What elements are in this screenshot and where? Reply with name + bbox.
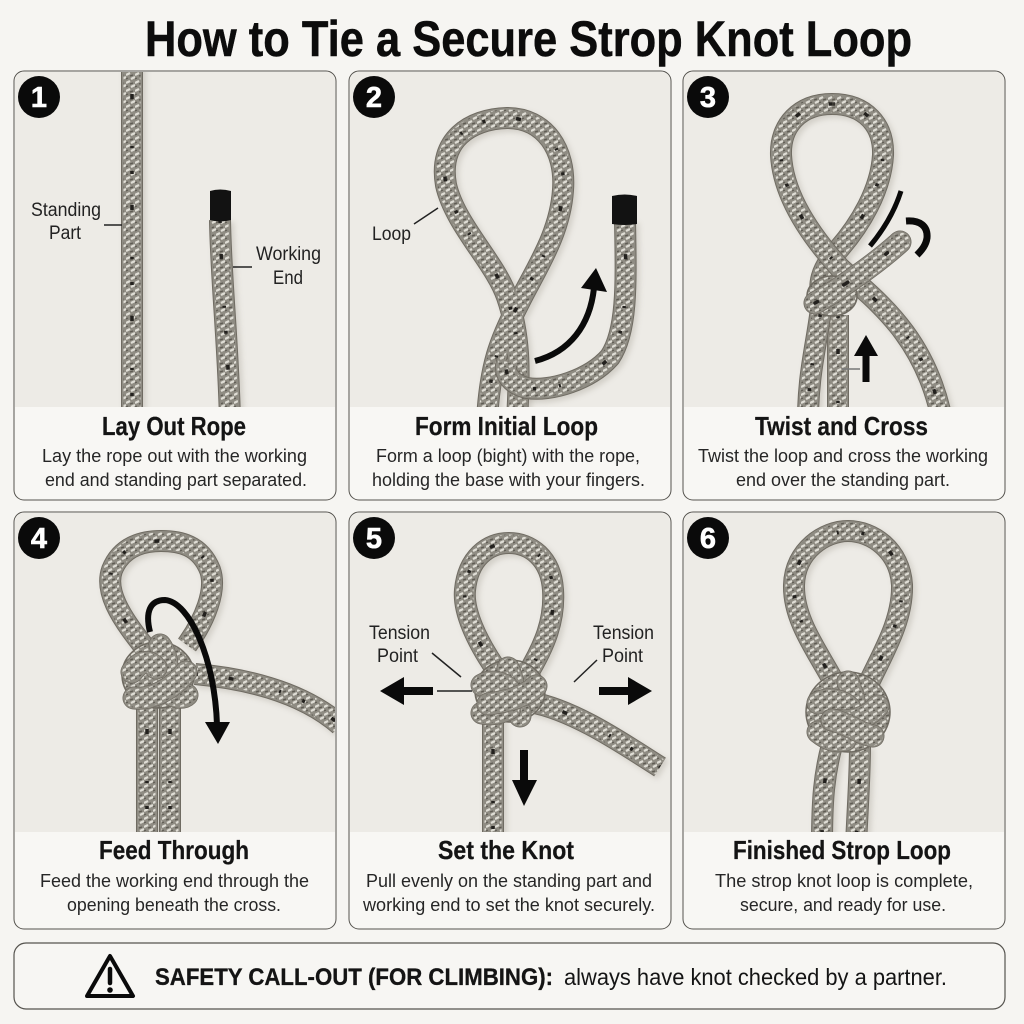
step number 5: 5 xyxy=(366,523,382,555)
label: standing part: Part xyxy=(49,223,82,244)
arrow: pull left xyxy=(380,677,433,705)
caption: lay out rope: Lay Out Rope xyxy=(102,411,246,441)
rope: tightened knot xyxy=(465,543,663,848)
label: working end xyxy=(233,244,321,289)
label: working end: Working xyxy=(256,244,321,265)
caption: lay out rope: end and standing part separated. xyxy=(45,469,307,490)
caption: lay out rope: Lay the rope out with the working xyxy=(42,445,307,466)
safety call-out xyxy=(14,943,1005,1009)
label: tension point right: Tension xyxy=(593,623,654,644)
arrow: feed through xyxy=(148,600,230,744)
label: tension point left xyxy=(369,623,472,691)
step number 6 xyxy=(687,517,729,559)
step number 1 xyxy=(18,76,60,118)
label: loop xyxy=(372,208,438,245)
caption: form initial loop: holding the base with your fingers. xyxy=(372,469,645,490)
arrow: up xyxy=(842,335,878,382)
caption: form initial loop xyxy=(372,411,645,490)
safety text xyxy=(155,964,947,991)
caption: form initial loop: Form a loop (bight) with the rope, xyxy=(376,445,640,466)
caption: twist and cross: end over the standing part. xyxy=(736,469,950,490)
caption: twist and cross xyxy=(698,411,988,490)
step number 3: 3 xyxy=(700,82,716,114)
caption: finished strop loop: The strop knot loop is complete, xyxy=(715,870,973,891)
label: standing part: Standing xyxy=(31,200,101,221)
rope: loop and working end xyxy=(445,118,637,423)
label: tension point left: Point xyxy=(377,646,419,667)
arrows: twist direction xyxy=(870,191,927,255)
caption: feed through: Feed Through xyxy=(99,835,249,865)
label: tension point right: Point xyxy=(602,646,644,667)
panel 6: finished strop loop xyxy=(683,512,1005,929)
caption: feed through: opening beneath the cross. xyxy=(67,894,281,915)
panel 3: twist and cross xyxy=(683,71,1005,500)
caption: finished strop loop xyxy=(715,835,973,915)
safety text: SAFETY CALL-OUT (FOR CLIMBING): xyxy=(155,964,553,991)
label: tension point left: Tension xyxy=(369,623,430,644)
panel 5: set the knot xyxy=(349,512,671,929)
step number 5 xyxy=(353,517,395,559)
caption: set the knot: working end to set the knot securely. xyxy=(362,894,655,915)
caption: set the knot xyxy=(362,835,655,915)
arrow: curved up xyxy=(535,268,607,361)
caption: twist and cross: Twist and Cross xyxy=(755,411,928,441)
step number 3 xyxy=(687,76,729,118)
caption: form initial loop: Form Initial Loop xyxy=(415,411,598,441)
step number 2: 2 xyxy=(366,82,382,114)
panel 4: feed through xyxy=(14,512,343,929)
panel 1: lay out rope xyxy=(14,60,336,500)
label: loop: Loop xyxy=(372,224,411,245)
safety text: always have knot checked by a partner. xyxy=(564,964,947,990)
caption: finished strop loop: Finished Strop Loop xyxy=(733,835,951,865)
caption: feed through xyxy=(40,835,309,915)
caption: finished strop loop: secure, and ready for use. xyxy=(740,894,946,915)
step number 4: 4 xyxy=(31,523,47,555)
caption: set the knot: Set the Knot xyxy=(438,835,574,865)
rope: standing part and working end xyxy=(132,60,233,422)
arrow: pull down xyxy=(512,750,537,806)
caption: twist and cross: Twist the loop and cross the working xyxy=(698,445,988,466)
caption: feed through: Feed the working end through the xyxy=(40,870,309,891)
icon: warning triangle xyxy=(87,956,133,996)
label: working end: End xyxy=(273,268,303,289)
caption: lay out rope xyxy=(42,411,307,490)
caption: set the knot: Pull evenly on the standing part and xyxy=(366,870,652,891)
step number 4 xyxy=(18,517,60,559)
rope: twisted loop xyxy=(781,104,945,423)
panel 2: form initial loop xyxy=(349,71,671,500)
rope: loop with knot xyxy=(110,541,343,848)
step number 1: 1 xyxy=(31,82,47,114)
arrow: pull right xyxy=(599,677,652,705)
label: tension point right xyxy=(574,623,654,682)
rope: finished loop xyxy=(794,531,905,848)
label: standing part xyxy=(31,200,122,244)
title: How to Tie a Secure Strop Knot Loop xyxy=(145,11,912,67)
step number 6: 6 xyxy=(700,523,716,555)
step number 2 xyxy=(353,76,395,118)
